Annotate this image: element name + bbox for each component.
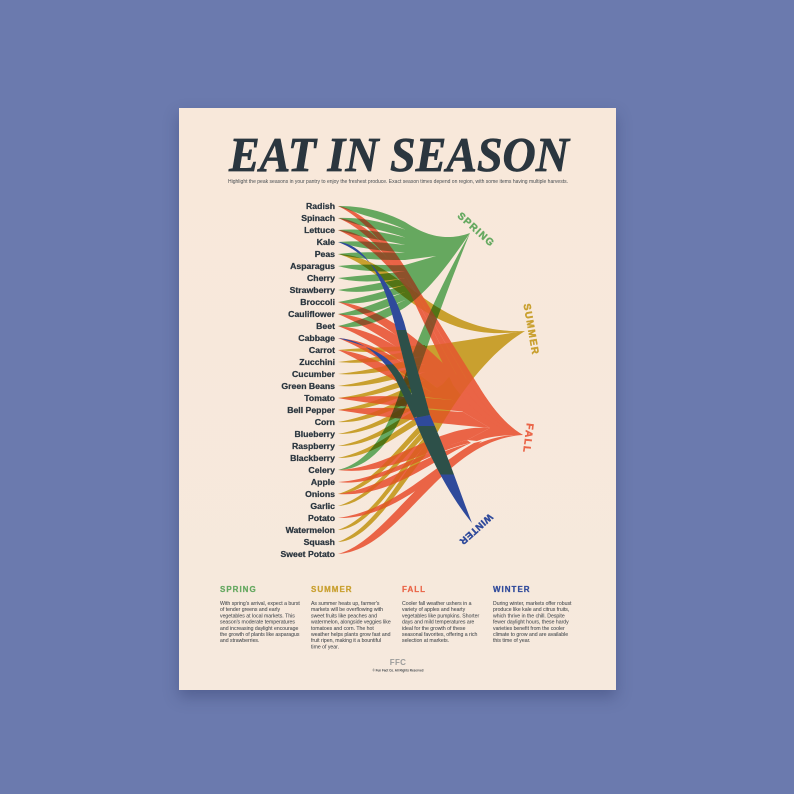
text column: summer: tomatoes and corn. The hot xyxy=(311,626,374,632)
text column: fall: days and mild temperatures are xyxy=(402,620,474,626)
food labels: Peas xyxy=(315,249,335,259)
fall flows xyxy=(338,206,523,554)
text column: spring: and strawberries. xyxy=(220,638,259,644)
fall flow tint over spring overlap xyxy=(338,206,523,435)
text column: winter: varieties benefit from the cooler xyxy=(493,626,565,632)
text column: summer xyxy=(311,585,391,650)
food labels: Beet xyxy=(316,321,335,331)
text column: fall: selection at markets. xyxy=(402,638,449,644)
title: EAT IN SEASON xyxy=(228,127,571,182)
text column: winter: climate to grow and are available xyxy=(493,632,568,638)
season label: spring: SPRING xyxy=(455,211,496,250)
text column: summer: markets will be overflowing with xyxy=(311,607,383,613)
food labels: Blackberry xyxy=(290,453,335,463)
text column: spring: SPRING xyxy=(220,585,257,594)
food labels: Broccoli xyxy=(300,297,335,307)
text column: summer: SUMMER xyxy=(311,585,353,594)
food labels: Spinach xyxy=(301,213,335,223)
food labels: Blueberry xyxy=(294,429,335,439)
season label: fall: FALL xyxy=(520,423,535,454)
food labels: Bell Pepper xyxy=(287,405,336,415)
text column: fall: seasonal favorites, offering a rich xyxy=(402,632,477,638)
text column: summer: weather helps plants grow fast and xyxy=(311,632,391,638)
logo: FFC xyxy=(390,658,406,667)
food labels: Garlic xyxy=(310,501,335,511)
food labels: Kale xyxy=(317,237,335,247)
text column: spring xyxy=(220,585,300,644)
food labels: Apple xyxy=(311,477,335,487)
text column: fall: FALL xyxy=(402,585,426,594)
text column: spring: season's moderate temperatures xyxy=(220,620,295,626)
food labels: Tomato xyxy=(304,393,335,403)
text column: summer: fruit ripen, making it a bountiful xyxy=(311,638,381,644)
text column: summer: As summer heats up, farmer's xyxy=(311,601,380,607)
text column: fall: variety of apples and hearty xyxy=(402,607,466,613)
food labels: Radish xyxy=(306,201,335,211)
text column: spring: vegetables at local markets. This xyxy=(220,613,295,619)
text column: fall xyxy=(402,585,479,644)
food labels: Cucumber xyxy=(292,369,336,379)
food labels: Celery xyxy=(308,465,335,475)
text column: fall: Cooler fall weather ushers in a xyxy=(402,601,472,607)
text column: winter: this time of year. xyxy=(493,638,530,644)
food labels: Cabbage xyxy=(298,333,335,343)
text column: summer: watermelon, alongside veggies like xyxy=(311,620,391,626)
food labels: Cherry xyxy=(307,273,335,283)
text column: spring: With spring's arrival, expect a burst xyxy=(220,601,300,607)
poster paper xyxy=(179,108,616,690)
food labels: Squash xyxy=(304,537,335,547)
food labels: Onions xyxy=(305,489,335,499)
copyright: © Fun Fact Co. All Rights Reserved xyxy=(372,668,424,672)
text column: fall: ideal for the growth of these xyxy=(402,626,466,632)
winter flows xyxy=(338,242,472,523)
food labels: Sweet Potato xyxy=(280,549,335,559)
food labels: Asparagus xyxy=(290,261,335,271)
text column: spring: of tender greens and early xyxy=(220,607,280,613)
food labels: Corn xyxy=(315,417,335,427)
season label: winter: WINTER xyxy=(457,511,495,547)
text column: winter: WINTER xyxy=(493,585,531,594)
text column: winter: produce like kale and citrus fruits, xyxy=(493,607,569,613)
food labels: Raspberry xyxy=(292,441,335,451)
spring flows xyxy=(338,206,470,470)
text column: winter: fewer daylight hours, these hardy xyxy=(493,620,569,626)
food labels xyxy=(280,201,336,559)
text column: fall: vegetables like pumpkins. Shorter xyxy=(402,613,479,619)
food labels: Potato xyxy=(308,513,335,523)
text column: summer: sweet fruits like peaches and xyxy=(311,613,377,619)
food labels: Lettuce xyxy=(304,225,335,235)
text column: spring: and increasing daylight encourage xyxy=(220,626,298,632)
summer flow tint over fall overlap xyxy=(338,254,525,542)
text column: winter: During winter, markets offer robust xyxy=(493,601,572,607)
food labels: Zucchini xyxy=(299,357,335,367)
text column: summer: time of year. xyxy=(311,644,339,650)
season label: summer: SUMMER xyxy=(521,303,540,356)
text column: spring: the growth of plants like asparagus xyxy=(220,632,300,638)
text column: winter xyxy=(493,585,572,644)
summer flows xyxy=(338,254,525,542)
food labels: Watermelon xyxy=(286,525,335,535)
text column: winter: which thrive in the chill. Despite xyxy=(493,613,565,619)
food labels: Carrot xyxy=(309,345,335,355)
subtitle: Highlight the peak seasons in your pantry to enjoy the freshest produce. Exact season times depend on region, with some items having multiple harvests. xyxy=(228,179,568,185)
food labels: Green Beans xyxy=(281,381,335,391)
food labels: Strawberry xyxy=(290,285,335,295)
food labels: Cauliflower xyxy=(288,309,336,319)
